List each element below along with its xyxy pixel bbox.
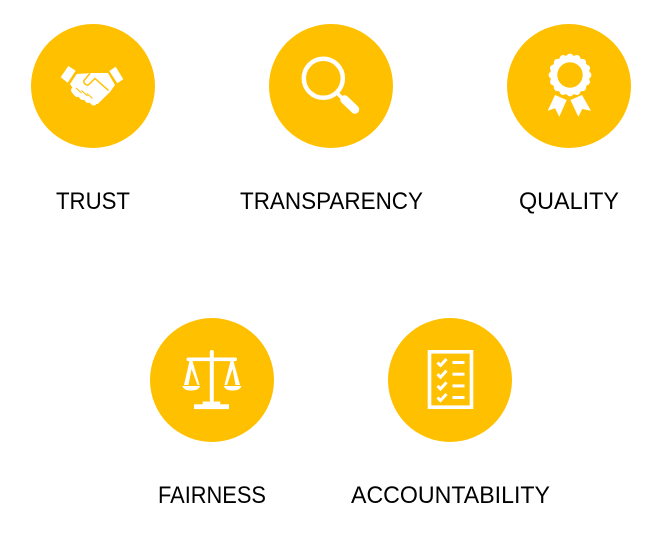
label: quality: QUALITY bbox=[519, 188, 619, 215]
label: transparency: TRANSPARENCY bbox=[240, 188, 423, 215]
icon: balance scale bbox=[182, 350, 242, 409]
icon: checklist bbox=[430, 352, 472, 407]
item: fairness bbox=[150, 318, 274, 509]
item: quality bbox=[507, 24, 631, 215]
circle: transparency bbox=[269, 24, 393, 148]
label: trust: TRUST bbox=[56, 188, 130, 215]
item: trust bbox=[31, 24, 155, 215]
circle: trust bbox=[31, 24, 155, 148]
label: fairness: FAIRNESS bbox=[158, 482, 266, 509]
icon: award ribbon bbox=[548, 54, 591, 117]
icon: handshake bbox=[61, 66, 123, 107]
label: accountability: ACCOUNTABILITY bbox=[351, 482, 550, 509]
circle: fairness bbox=[150, 318, 274, 442]
item: transparency bbox=[240, 24, 423, 215]
circle: accountability bbox=[388, 318, 512, 442]
icon: magnifying glass bbox=[304, 59, 355, 110]
circle: quality bbox=[507, 24, 631, 148]
item: accountability bbox=[351, 318, 550, 509]
